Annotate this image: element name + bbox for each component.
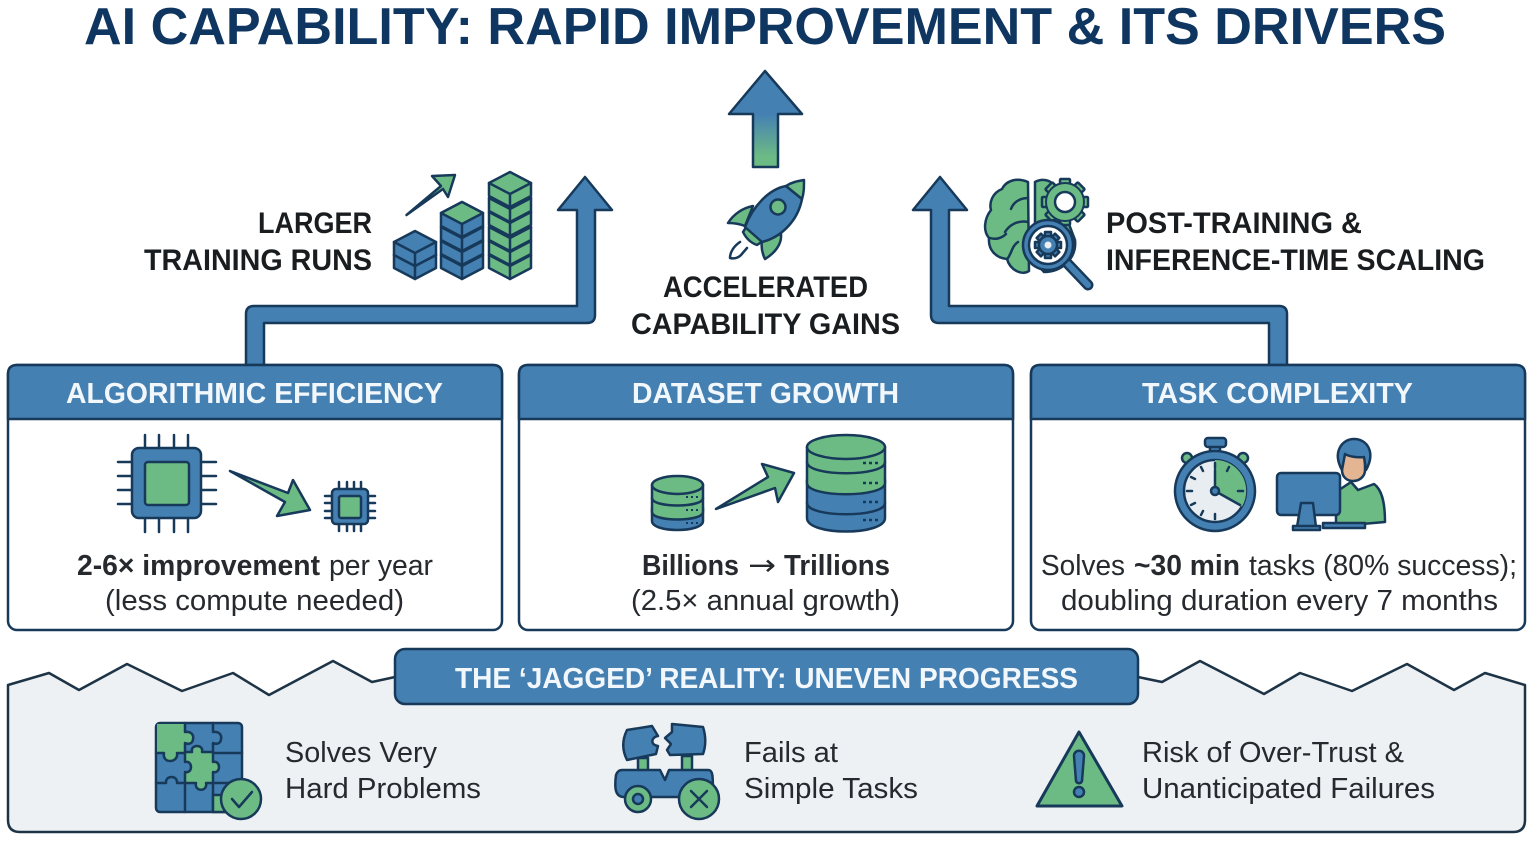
text: risk of over-trust (1142, 737, 1435, 805)
text: dataset growth statistic: Trillions (784, 550, 890, 582)
icon: rocket (728, 180, 804, 259)
label: post-training and inference-time scaling (1106, 207, 1485, 277)
banner: jagged reality heading (395, 649, 1138, 704)
text: algorithmic efficiency statistic: (less compute needed) (105, 585, 404, 617)
text: risk of over-trust: Risk of Over-Trust & (1142, 737, 1404, 769)
icon: brain with gear and magnifier (985, 179, 1088, 285)
panel header: dataset growth (519, 365, 1013, 419)
icon: person at computer (1277, 439, 1385, 530)
text: algorithmic efficiency statistic: 2-6× improvement (77, 550, 320, 582)
heading: algorithmic efficiency: ALGORITHMIC EFFICIENCY (66, 378, 443, 410)
text: fails at simple tasks: Simple Tasks (744, 773, 918, 805)
label: larger training runs: LARGER (258, 207, 372, 240)
label: larger training runs (144, 207, 372, 277)
panel header: task complexity (1031, 365, 1525, 419)
banner: jagged reality heading: THE ‘JAGGED’ REALITY: UNEVEN PROGRESS (455, 663, 1078, 695)
icon: broken robot cart (615, 724, 719, 819)
arrow: central upward gradient arrow (729, 71, 802, 167)
text: task complexity statistic: ~30 min (1134, 550, 1240, 582)
panel: jagged reality (8, 649, 1525, 832)
heading: dataset growth: DATASET GROWTH (632, 378, 899, 410)
label: post-training and inference-time scaling: INFERENCE-TIME SCALING (1106, 244, 1485, 277)
text: dataset growth statistic: (2.5× annual growth) (631, 585, 900, 617)
icon: puzzle with check mark (156, 723, 261, 819)
label: accelerated capability gains: ACCELERATED (663, 271, 868, 304)
text: fails at simple tasks: Fails at (744, 737, 838, 769)
text: solves very hard problems: Hard Problems (285, 773, 481, 805)
icon: growing stacks of blocks with arrow (394, 172, 531, 279)
icon: warning triangle (1037, 732, 1122, 806)
arrow: left connector from algorithmic efficiency (246, 177, 612, 366)
text: task complexity statistic (1041, 550, 1517, 617)
text: task complexity statistic: Solves (1041, 550, 1125, 582)
text: risk of over-trust: Unanticipated Failures (1142, 773, 1435, 805)
label: accelerated capability gains: CAPABILITY GAINS (631, 308, 900, 341)
text: fails at simple tasks (744, 737, 918, 805)
text: task complexity statistic: doubling duration every 7 months (1061, 585, 1498, 617)
panel: dataset growth (519, 365, 1013, 630)
icon: small database growing to large database (652, 435, 885, 532)
panel: task complexity (1031, 365, 1525, 630)
label: larger training runs: TRAINING RUNS (144, 244, 372, 277)
text: dataset growth statistic (631, 548, 900, 617)
arrow: right connector from task complexity (913, 177, 1287, 366)
text: dataset growth statistic: → (748, 548, 776, 582)
label: post-training and inference-time scaling: POST-TRAINING & (1106, 207, 1362, 240)
icon: large chip shrinking to small chip (118, 435, 375, 532)
text: solves very hard problems (285, 737, 481, 805)
panel header: algorithmic efficiency (8, 365, 502, 419)
text: task complexity statistic: tasks (80% success); (1249, 550, 1517, 582)
heading: task complexity: TASK COMPLEXITY (1142, 378, 1413, 410)
panel: algorithmic efficiency (8, 365, 502, 630)
text: algorithmic efficiency statistic (77, 550, 433, 617)
icon: stopwatch (1175, 438, 1255, 531)
text: solves very hard problems: Solves Very (285, 737, 437, 769)
text: algorithmic efficiency statistic: per year (329, 550, 433, 582)
label: accelerated capability gains (631, 271, 900, 341)
text: dataset growth statistic: Billions (642, 550, 739, 582)
